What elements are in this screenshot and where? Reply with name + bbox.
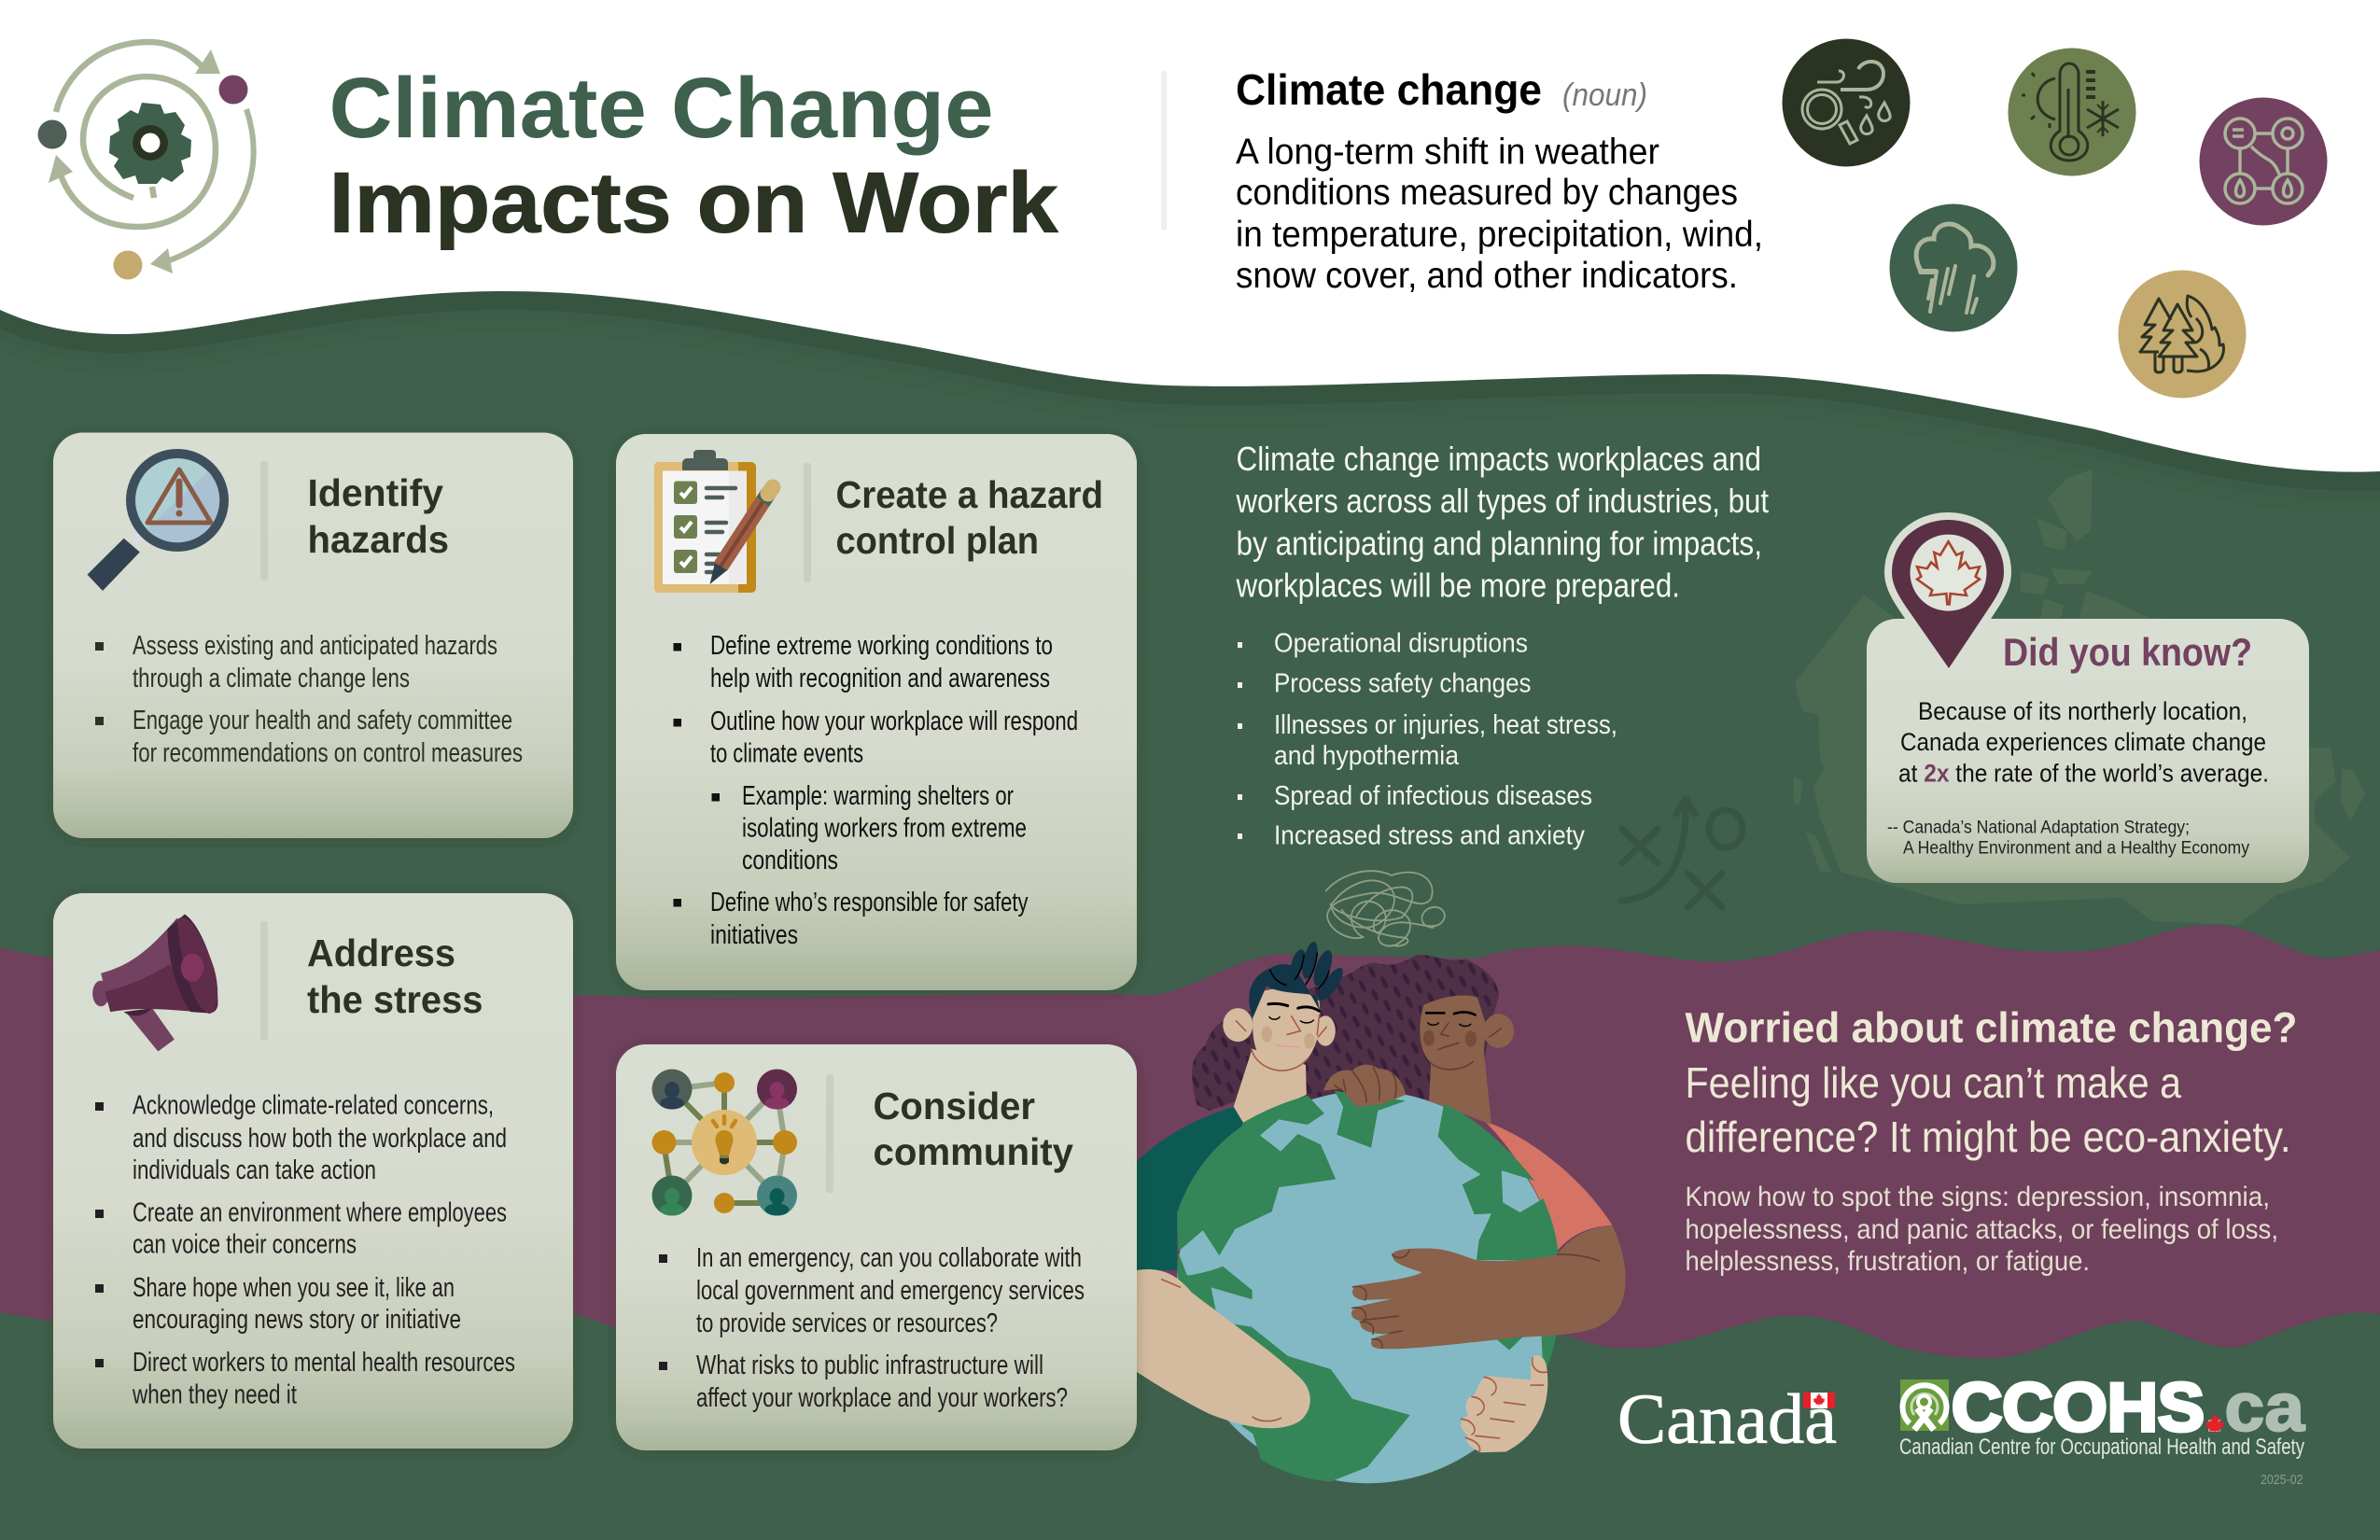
title bbox=[329, 61, 1058, 250]
icon: rain cloud bbox=[1889, 203, 2018, 332]
bullet list: Outline how your workplace will respond bbox=[710, 707, 1078, 736]
source: -- Canada’s National Adaptation Strategy; bbox=[1887, 818, 2190, 838]
bullet list: when they need it bbox=[132, 1379, 297, 1409]
heading: Consider bbox=[874, 1085, 1035, 1127]
scribble of worry bbox=[1325, 871, 1445, 946]
bullet list: conditions bbox=[742, 846, 838, 875]
icon: map pin with maple leaf bbox=[1892, 520, 2004, 668]
impacts list: Process safety changes bbox=[1274, 668, 1531, 698]
icon: thermometer, sun and snow bbox=[2009, 49, 2135, 175]
right arm with hand bbox=[1351, 1225, 1626, 1349]
icon: magnifying glass with warning bbox=[88, 449, 229, 591]
bullet list: Acknowledge climate-related concerns, bbox=[133, 1090, 494, 1120]
bullet list: local government and emergency services bbox=[696, 1276, 1085, 1306]
definition: A long-term shift in weather bbox=[1236, 133, 1659, 172]
bullet list: help with recognition and awareness bbox=[710, 664, 1050, 693]
bullet list bbox=[95, 631, 523, 768]
source: A Healthy Environment and a Healthy Economy bbox=[1903, 838, 2249, 859]
canada wordmark: Canada bbox=[1617, 1380, 1837, 1459]
fact text bbox=[1898, 697, 2269, 788]
panel: consider community bbox=[616, 1044, 1137, 1450]
fact text: Canada experiences climate change bbox=[1900, 728, 2266, 756]
bullet list: Engage your health and safety committee bbox=[133, 706, 512, 735]
impacts list: Spread of infectious diseases bbox=[1274, 781, 1592, 811]
bullet list bbox=[674, 631, 1078, 950]
heading bbox=[308, 471, 449, 561]
coral shirt bbox=[1485, 1122, 1612, 1251]
icon: wind and weather magnifier bbox=[1783, 39, 1910, 166]
strategy icon bbox=[1621, 799, 1743, 907]
eco-anxiety text: difference? It might be eco-anxiety. bbox=[1686, 1113, 2290, 1161]
panel: hazard control plan bbox=[616, 434, 1137, 990]
icon: community network bbox=[651, 1070, 797, 1215]
fact text: at 2x the rate of the world’s average. bbox=[1898, 760, 2269, 788]
bullet list: Define extreme working conditions to bbox=[710, 631, 1053, 661]
bullet list: to provide services or resources? bbox=[696, 1309, 998, 1338]
bullet list: Direct workers to mental health resources bbox=[133, 1348, 515, 1378]
bullet list: encouraging news story or initiative bbox=[133, 1305, 461, 1335]
heading: hazards bbox=[308, 518, 449, 561]
definition: snow cover, and other indicators. bbox=[1236, 256, 1738, 296]
man's neck and face bbox=[1223, 940, 1347, 1123]
definition bbox=[1161, 65, 1763, 296]
heading: control plan bbox=[836, 519, 1039, 562]
ccohs logo bbox=[1899, 1370, 2305, 1460]
impacts list bbox=[1238, 629, 1617, 851]
teal shirt bbox=[1113, 1107, 1243, 1270]
eco-anxiety text: helplessness, frustration, or fatigue. bbox=[1686, 1246, 2090, 1277]
definition: conditions measured by changes bbox=[1236, 173, 1738, 213]
bullet list: for recommendations on control measures bbox=[133, 738, 523, 768]
main intro text: by anticipating and planning for impacts, bbox=[1236, 525, 1762, 562]
main intro text: workers across all types of industries, but bbox=[1236, 482, 1769, 520]
title: Impacts on Work bbox=[329, 155, 1058, 250]
definition: Climate change bbox=[1236, 65, 1542, 114]
bullet list: isolating workers from extreme bbox=[742, 814, 1027, 844]
heading: Identify bbox=[308, 471, 443, 514]
bullet list: individuals can take action bbox=[133, 1155, 376, 1185]
bullet list: Define who’s responsible for safety bbox=[710, 888, 1029, 917]
icon: forest fire bbox=[2119, 271, 2246, 398]
top hand bbox=[1323, 1065, 1406, 1107]
bullet list: Create an environment where employees bbox=[133, 1198, 507, 1228]
eco-anxiety text: hopelessness, and panic attacks, or feelings of loss, bbox=[1686, 1214, 2278, 1245]
heading: Create a hazard bbox=[836, 473, 1103, 516]
eco-anxiety text: Feeling like you can’t make a bbox=[1686, 1058, 2181, 1107]
bullet list: through a climate change lens bbox=[133, 664, 410, 693]
main intro text: workplaces will be more prepared. bbox=[1236, 566, 1680, 605]
plum wave band bbox=[0, 925, 2380, 1358]
heading: Did you know? bbox=[2003, 630, 2252, 674]
fact text: Because of its northerly location, bbox=[1918, 697, 2247, 725]
icon: megaphone bbox=[92, 915, 217, 1051]
definition: (noun) bbox=[1562, 77, 1647, 113]
ccohs logo: .ca bbox=[2205, 1370, 2305, 1446]
impacts list: and hypothermia bbox=[1274, 741, 1460, 771]
bullet list bbox=[659, 1243, 1085, 1413]
main intro text bbox=[1236, 440, 1769, 605]
bullet list: Assess existing and anticipated hazards bbox=[133, 631, 497, 661]
left arm bbox=[1113, 1269, 1310, 1428]
heading bbox=[874, 1085, 1073, 1173]
bullet list: In an emergency, can you collaborate with bbox=[696, 1243, 1082, 1273]
definition: in temperature, precipitation, wind, bbox=[1236, 215, 1763, 255]
bullet list: Share hope when you see it, like an bbox=[133, 1273, 455, 1303]
heading bbox=[307, 931, 483, 1021]
ccohs logo: CCOHS bbox=[1952, 1370, 2205, 1446]
impacts list: Increased stress and anxiety bbox=[1274, 821, 1585, 851]
impacts list: Illnesses or injuries, heat stress, bbox=[1274, 710, 1617, 740]
globe bbox=[1177, 1091, 1559, 1483]
panel: did you know bbox=[1867, 520, 2309, 883]
icon: connected elements bbox=[2199, 97, 2328, 226]
panel: address the stress bbox=[53, 893, 573, 1449]
date stamp: 2025-02 bbox=[2261, 1473, 2303, 1488]
eco-anxiety text: Know how to spot the signs: depression, insomnia, bbox=[1686, 1182, 2270, 1212]
bullet list: Example: warming shelters or bbox=[742, 781, 1014, 811]
bullet list: and discuss how both the workplace and bbox=[133, 1124, 507, 1154]
impacts list: Operational disruptions bbox=[1274, 629, 1528, 659]
illustration: two people hugging the globe bbox=[1113, 871, 1626, 1483]
hair of the woman bbox=[1192, 955, 1499, 1111]
source bbox=[1887, 818, 2249, 859]
eco-anxiety text bbox=[1686, 1004, 2298, 1277]
canada map silhouette bbox=[1793, 469, 2365, 925]
main intro text: Climate change impacts workplaces and bbox=[1236, 440, 1761, 478]
eco-anxiety text: Worried about climate change? bbox=[1686, 1004, 2298, 1051]
panel: identify hazards bbox=[53, 433, 573, 838]
heading: the stress bbox=[307, 978, 483, 1021]
bottom hand bbox=[1461, 1355, 1547, 1452]
bullet list: can voice their concerns bbox=[133, 1230, 357, 1260]
logo: climate cycle with gear bbox=[37, 42, 254, 280]
icon: clipboard and pencil bbox=[654, 450, 773, 593]
bullet list: What risks to public infrastructure will bbox=[696, 1351, 1043, 1380]
bullet list bbox=[95, 1090, 515, 1409]
title: Climate Change bbox=[329, 61, 993, 156]
woman's neck and face bbox=[1420, 996, 1514, 1125]
bullet list: initiatives bbox=[710, 920, 798, 950]
bullet list: to climate events bbox=[710, 739, 863, 769]
heading: Address bbox=[307, 931, 455, 974]
bullet list: affect your workplace and your workers? bbox=[696, 1383, 1068, 1413]
heading bbox=[836, 473, 1103, 562]
heading: community bbox=[874, 1130, 1073, 1173]
